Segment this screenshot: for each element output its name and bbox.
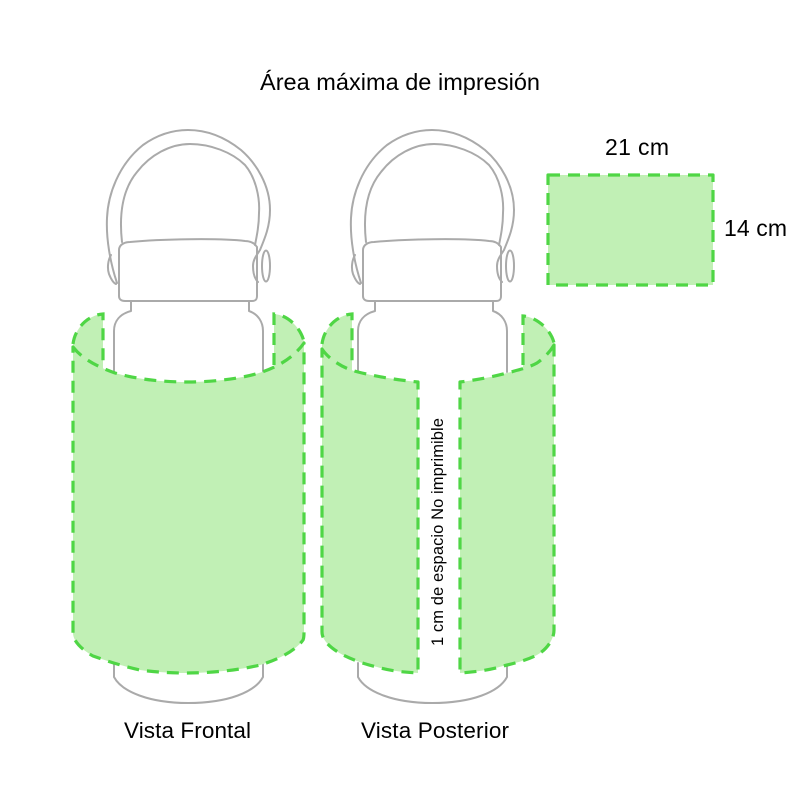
icon: bottle base — [358, 663, 507, 703]
bottle: front view — [73, 130, 304, 703]
print area sample rectangle — [548, 175, 713, 285]
caption: back view: Vista Posterior — [361, 718, 510, 743]
print area: front — [73, 343, 304, 673]
icon: left handle pin — [108, 255, 116, 284]
icon: handle — [107, 130, 270, 283]
icon: bottle base — [114, 663, 263, 703]
icon: right handle pin — [506, 250, 514, 282]
height label: 14 cm — [724, 215, 787, 241]
back flap right — [523, 316, 554, 375]
bottle: back view — [322, 130, 554, 703]
back flap right — [274, 314, 304, 375]
title: Área máxima de impresión — [260, 69, 540, 95]
width label: 21 cm — [605, 134, 669, 160]
back flap left — [73, 314, 103, 375]
back flap left — [322, 314, 352, 375]
print area: right panel — [460, 345, 554, 673]
icon: bottle body — [114, 301, 263, 372]
print area: left panel — [322, 349, 418, 673]
icon: cap — [119, 239, 257, 301]
label: non-printable gap: 1 cm de espacio No imprimible — [429, 418, 447, 646]
icon: cap — [363, 239, 501, 301]
icon: right handle pin — [262, 250, 270, 282]
icon: handle — [351, 130, 514, 283]
icon: bottle body — [358, 301, 507, 372]
caption: front view: Vista Frontal — [124, 718, 251, 743]
icon: left handle pin — [352, 255, 360, 284]
